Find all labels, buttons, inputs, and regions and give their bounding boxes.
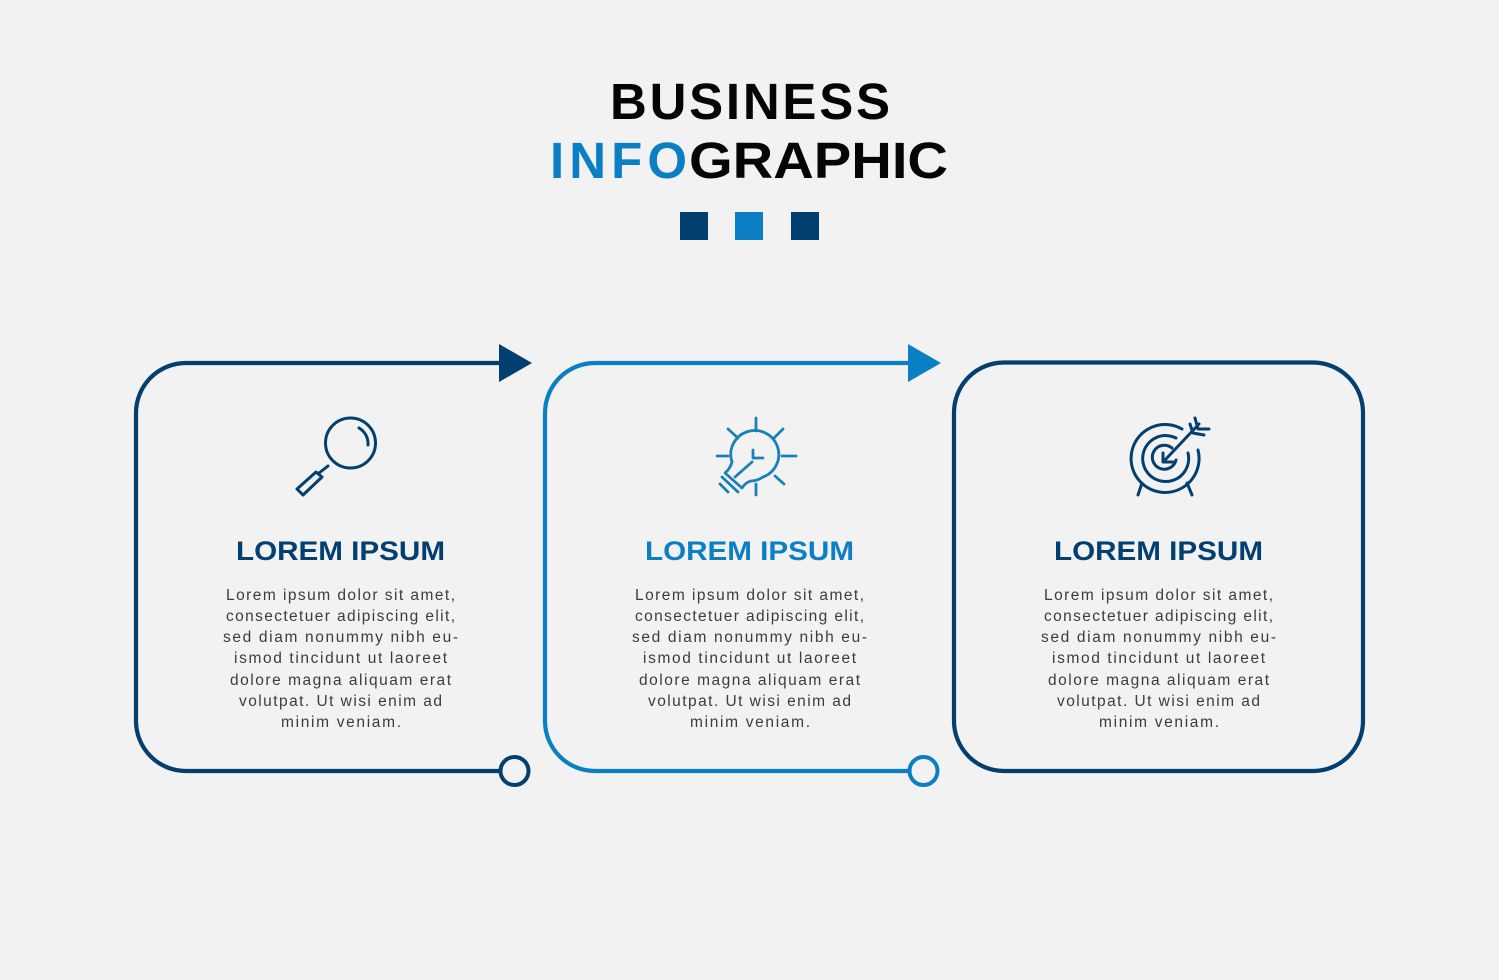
title: INFO [550, 132, 687, 189]
text block 3: dolore magna aliquam erat [1048, 672, 1270, 689]
panel: step 1 [136, 344, 532, 785]
title: GRAPHIC [689, 132, 948, 189]
panel: step 3 [954, 362, 1363, 771]
text block 1 [223, 587, 458, 731]
title squares [680, 212, 819, 240]
panel 2 outline [545, 363, 911, 771]
text block 1: volutpat. Ut wisi enim ad [239, 693, 442, 710]
text block 3: ismod tincidunt ut laoreet [1052, 650, 1266, 667]
text block 2: dolore magna aliquam erat [639, 672, 861, 689]
panel 1 outline [136, 363, 502, 771]
title [550, 73, 948, 189]
title: BUSINESS [610, 73, 890, 130]
arrow 1 [499, 344, 532, 382]
text block 1: sed diam nonummy nibh eu- [223, 629, 458, 646]
text block 2: consectetuer adipiscing elit, [635, 608, 864, 625]
text block 3 [1041, 587, 1276, 731]
text block 2: sed diam nonummy nibh eu- [632, 629, 867, 646]
text block 3: consectetuer adipiscing elit, [1044, 608, 1273, 625]
panel 3 outline [954, 362, 1363, 771]
icon: magnifying glass [297, 418, 376, 495]
text block 1: Lorem ipsum dolor sit amet, [226, 587, 455, 604]
text block 2 [632, 587, 867, 731]
icon: light bulb with clock [717, 418, 796, 495]
arrow 2 [908, 344, 941, 382]
heading 3: LOREM IPSUM [1054, 536, 1263, 566]
text block 2: ismod tincidunt ut laoreet [643, 650, 857, 667]
text block 1: dolore magna aliquam erat [230, 672, 452, 689]
text block 1: ismod tincidunt ut laoreet [234, 650, 448, 667]
connector circle 2 [910, 757, 938, 785]
panel: step 2 [545, 344, 941, 785]
connector circle 1 [500, 757, 528, 785]
icon: target with arrow [1131, 418, 1209, 495]
text block 3: volutpat. Ut wisi enim ad [1057, 693, 1260, 710]
text block 3: minim veniam. [1099, 714, 1219, 731]
text block 3: Lorem ipsum dolor sit amet, [1044, 587, 1273, 604]
text block 2: Lorem ipsum dolor sit amet, [635, 587, 864, 604]
heading 2: LOREM IPSUM [645, 536, 854, 566]
heading 1: LOREM IPSUM [236, 536, 445, 566]
text block 1: minim veniam. [281, 714, 401, 731]
text block 2: volutpat. Ut wisi enim ad [648, 693, 851, 710]
text block 2: minim veniam. [690, 714, 810, 731]
text block 3: sed diam nonummy nibh eu- [1041, 629, 1276, 646]
text block 1: consectetuer adipiscing elit, [226, 608, 455, 625]
